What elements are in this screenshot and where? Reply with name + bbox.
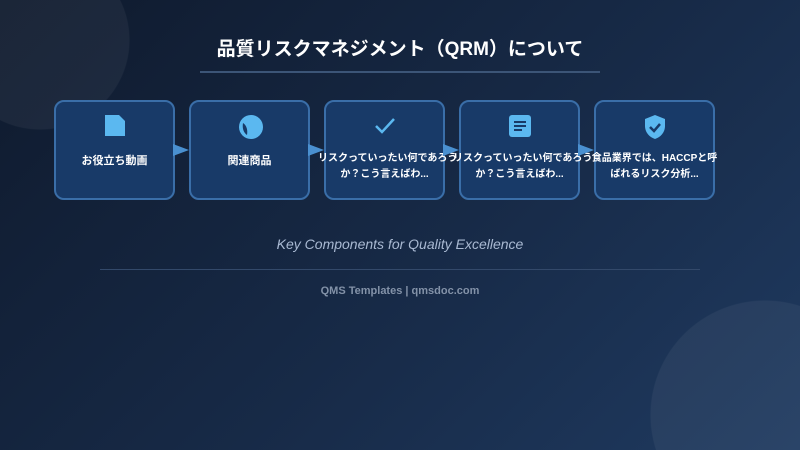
- card 2: 関連商品: [228, 155, 272, 167]
- card 5: ばれるリスク分析...: [610, 169, 699, 180]
- arrow 4: [578, 144, 594, 156]
- arrow 1: [173, 144, 189, 156]
- card 1: お役立ち動画: [82, 155, 148, 167]
- card 4: か？こう言えばわ...: [475, 169, 564, 180]
- title: 品質リスクマネジメント（QRM）について: [217, 39, 583, 60]
- card 4: リスクっていったい何であろう: [453, 153, 592, 164]
- card 3: か？こう言えばわ...: [340, 169, 429, 180]
- card 5: 食品業界では、HACCPと呼: [592, 153, 717, 164]
- card 1: [54, 100, 175, 200]
- card 4: [459, 100, 580, 200]
- card 3: [324, 100, 445, 200]
- arrow 2: [308, 144, 324, 156]
- arrow 3: [443, 144, 459, 156]
- footer: QMS Templates | qmsdoc.com: [321, 285, 479, 297]
- card 2: [189, 100, 310, 200]
- card 3: リスクっていったい何であろう: [318, 153, 457, 164]
- subtitle: Key Components for Quality Excellence: [277, 236, 523, 252]
- card 5: [594, 100, 715, 200]
